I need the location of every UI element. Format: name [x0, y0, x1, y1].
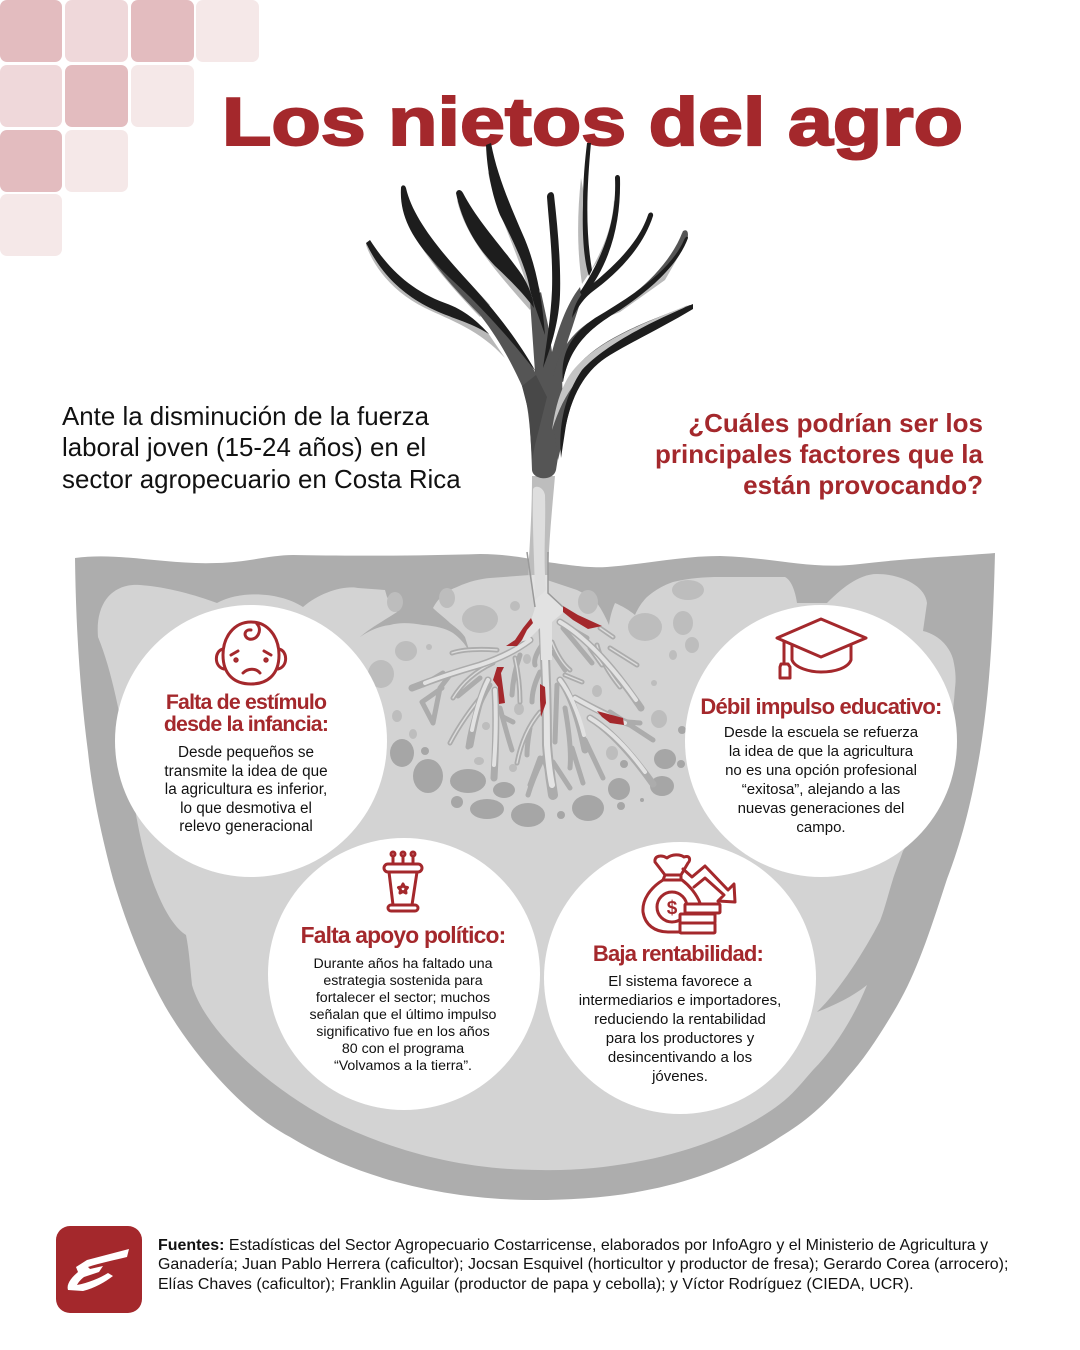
title: Los nietos del agro [222, 84, 963, 160]
heading: Baja rentabilidad: [593, 941, 763, 966]
body text: jóvenes. [651, 1068, 708, 1085]
intro text: sector agropecuario en Costa Rica [62, 466, 461, 494]
body text: lo que desmotiva el [180, 800, 312, 817]
panel: politics [268, 838, 540, 1110]
body text: no es una opción profesional [725, 762, 917, 779]
body text: desincentivando a los [608, 1049, 752, 1066]
sources: Fuentes: Estadísticas del Sector Agropecuario Costarricense, elaborados por InfoAgro y el Ministerio de Agricultura y [158, 1237, 988, 1254]
plant leaves [366, 143, 693, 478]
body text: Durante años ha faltado una [313, 956, 493, 972]
icon: graduation cap [777, 619, 866, 678]
question text: principales factores que la [655, 439, 984, 469]
body text: para los productores y [606, 1030, 755, 1047]
body text: estrategia sostenida para [323, 973, 483, 989]
panel: early childhood [115, 605, 387, 877]
intro text: laboral joven (15-24 años) en el [62, 434, 426, 462]
icon: money bag with falling arrow: $ [667, 898, 678, 919]
body text: significativo fue en los años [316, 1024, 490, 1040]
body text: Desde pequeños se [178, 744, 314, 761]
root crown [518, 560, 566, 660]
root damage marks [493, 606, 624, 725]
roots [412, 622, 653, 795]
body text: transmite la idea de que [164, 763, 328, 780]
sources: Elías Chaves (caficultor); Franklin Aguilar (productor de papa y cebolla); y Víctor Rodríguez (CIEDA, UCR). [158, 1276, 914, 1293]
body text: 80 con el programa [342, 1041, 464, 1057]
body text: Desde la escuela se refuerza [724, 724, 919, 741]
body text: fortalecer el sector; muchos [316, 990, 490, 1006]
body text: campo. [796, 819, 846, 836]
question text: ¿Cuáles podrían ser los [688, 408, 983, 438]
question text [655, 408, 984, 500]
body text: El sistema favorece a [608, 973, 752, 990]
body text: “Volvamos a la tierra”. [334, 1058, 472, 1074]
heading: Falta apoyo político: [301, 922, 505, 948]
icon: money bag with falling arrow [643, 855, 735, 933]
question text: están provocando? [743, 470, 983, 500]
intro text [62, 403, 461, 494]
body text: intermediarios e importadores, [579, 992, 781, 1009]
body text: la agricultura es inferior, [165, 781, 327, 798]
body text: señalan que el último impulso [310, 1007, 497, 1023]
sources [158, 1237, 1008, 1293]
icon: podium [384, 852, 422, 911]
body text: la idea de que la agricultura [729, 743, 914, 760]
body text: relevo generacional [179, 818, 313, 835]
heading: Falta de estímulo [166, 690, 327, 714]
body text: reduciendo la rentabilidad [594, 1011, 766, 1028]
plant stem [527, 476, 563, 607]
soil bowl [75, 553, 995, 1200]
body text: nuevas generaciones del [738, 800, 904, 817]
icon: sad baby [216, 622, 286, 684]
rocks in soil [368, 580, 704, 827]
panel: profitability [544, 842, 816, 1114]
logo [56, 1226, 142, 1313]
decorative tile grid [0, 0, 259, 256]
panel: education [685, 605, 957, 877]
heading: desde la infancia: [164, 712, 328, 736]
intro text: Ante la disminución de la fuerza [62, 403, 430, 431]
sources: Ganadería; Juan Pablo Herrera (caficultor); Jocsan Esquivel (horticultor y productor de fresa); Gerardo Corea (arrocero); [158, 1256, 1008, 1273]
heading: Débil impulso educativo: [700, 694, 942, 719]
body text: “exitosa”, alejando a las [742, 781, 900, 798]
